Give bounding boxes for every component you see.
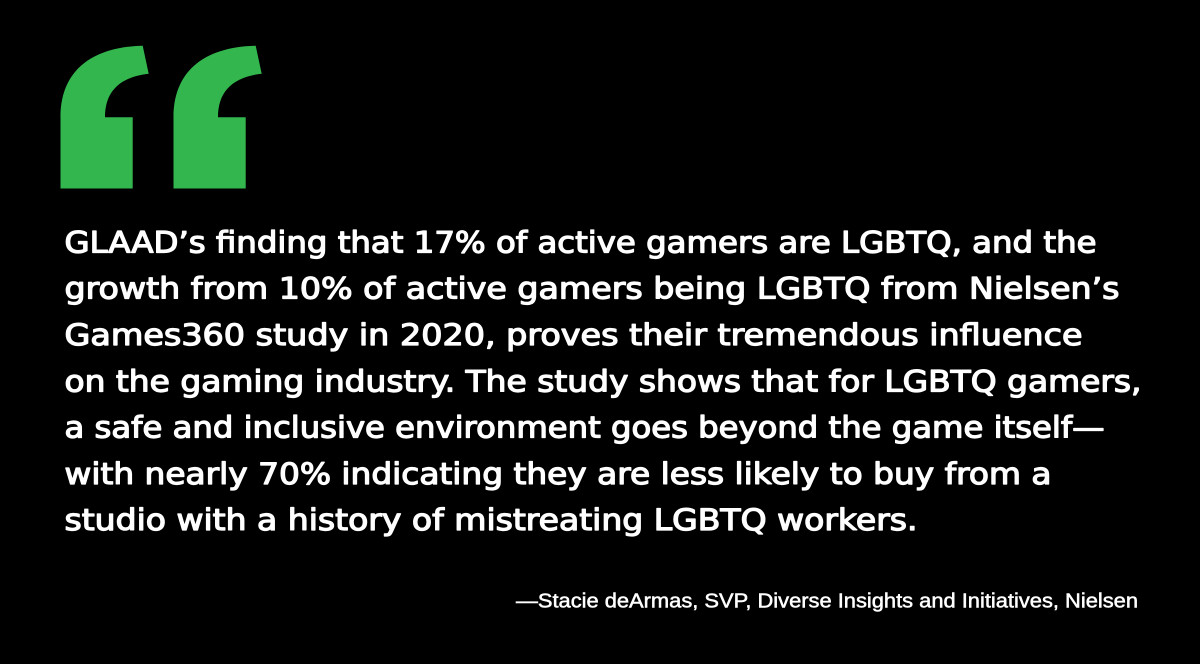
- quote text: Games360 study in 2020, proves their tremendous influence: [64, 318, 1082, 352]
- quote text: studio with a history of mistreating LGBTQ workers.: [64, 503, 918, 537]
- quote text: with nearly 70% indicating they are less likely to buy from a: [64, 457, 1052, 491]
- quote text: [64, 226, 1142, 537]
- quote text: GLAAD’s finding that 17% of active gamers are LGBTQ, and the: [64, 226, 1096, 260]
- quote text: a safe and inclusive environment goes beyond the game itself—: [64, 410, 1104, 444]
- quote text: on the gaming industry. The study shows that for LGBTQ gamers,: [64, 364, 1142, 398]
- attribution: —Stacie deArmas, SVP, Diverse Insights and Initiatives, Nielsen: [516, 590, 1138, 612]
- quote text: growth from 10% of active gamers being LGBTQ from Nielsen’s: [64, 272, 1120, 306]
- icon: green quotation marks: [60, 46, 262, 189]
